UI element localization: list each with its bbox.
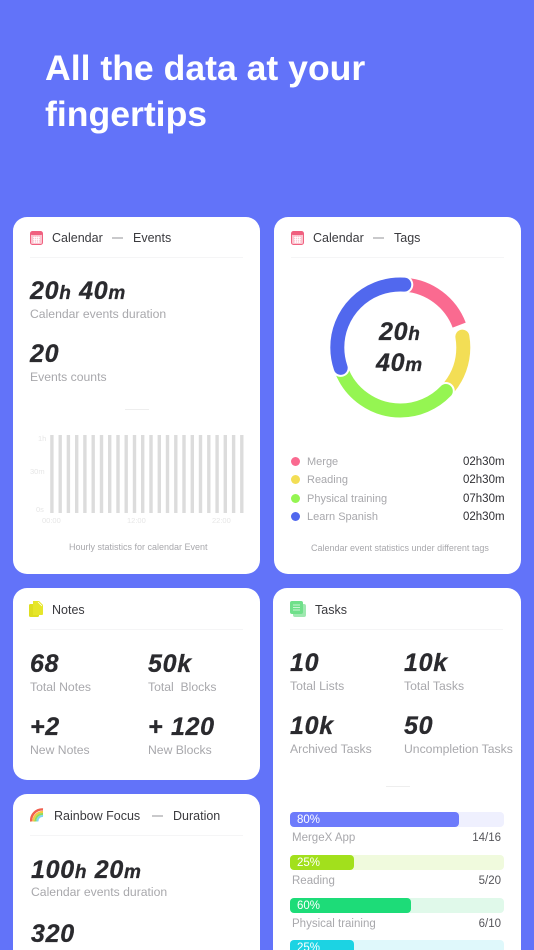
progress: Physical training: 60%	[297, 900, 320, 912]
chart caption: Calendar event statistics under different tags	[311, 543, 489, 553]
label: total notes: Total Notes	[30, 680, 91, 694]
progress: MergeX App	[290, 812, 504, 844]
progress: Reading: Reading	[292, 875, 335, 887]
progress: Reading	[290, 855, 504, 887]
label: new blocks: New Blocks	[148, 743, 212, 757]
panel heading: Notes	[52, 603, 85, 617]
icon: tasks	[290, 601, 306, 617]
icon: rainbow	[30, 808, 44, 822]
bar chart: hourly statistics: 30m	[30, 467, 45, 476]
bar chart: hourly statistics: 00:00	[42, 516, 61, 525]
bar chart: hourly statistics: 12:00	[127, 516, 146, 525]
progress: Reading: 25%	[297, 857, 320, 869]
panel: tasks	[273, 588, 521, 950]
progress: Physical training	[290, 898, 504, 930]
legend: Physical training	[307, 493, 387, 505]
bar chart: hourly statistics: 1h	[38, 434, 46, 443]
label: new notes: New Notes	[30, 743, 90, 757]
stat: event count: 20	[30, 340, 59, 368]
panel heading: Tasks	[315, 603, 347, 617]
panel: calendar events	[13, 217, 260, 574]
progress: Reading: 5/20	[479, 875, 501, 887]
panel: calendar events: Events	[133, 231, 171, 245]
stat: new notes: +2	[30, 713, 60, 741]
legend: Reading	[307, 474, 348, 486]
label: uncompletion tasks: Uncompletion Tasks	[404, 742, 513, 756]
panel heading: Calendar	[52, 231, 103, 245]
title: fingertips	[45, 94, 207, 134]
stat: duration: 100h 20m	[31, 856, 142, 884]
stat: uncompletion tasks: 50	[404, 712, 433, 740]
progress: MergeX App: MergeX App	[292, 832, 355, 844]
label: total tasks: Total Tasks	[404, 679, 464, 693]
legend: 07h30m	[463, 493, 505, 505]
stat: total blocks: 50k	[148, 650, 192, 678]
icon: calendar	[30, 231, 43, 245]
chart caption: Hourly statistics for calendar Event	[69, 542, 208, 552]
panel: calendar tags	[274, 217, 521, 574]
donut centre value: 20h	[379, 318, 421, 346]
panel: calendar tags: 40m	[376, 349, 423, 377]
label: total lists: Total Lists	[290, 679, 344, 693]
legend: 02h30m	[463, 474, 505, 486]
stat: total notes: 68	[30, 650, 59, 678]
title: All the data at your	[45, 48, 365, 88]
panel: rainbow focus: Duration	[173, 809, 220, 823]
progress: MergeX App: 80%	[297, 814, 320, 826]
legend: Merge	[307, 456, 338, 468]
stat: duration: 20h 40m	[30, 277, 126, 305]
bar chart: hourly statistics	[30, 434, 244, 525]
legend: Learn Spanish	[307, 511, 378, 523]
stat: archived tasks: 10k	[290, 712, 334, 740]
progress: Physical training: 6/10	[479, 918, 501, 930]
label: total blocks: Total Blocks	[148, 680, 216, 694]
progress: MergeX App: 14/16	[472, 832, 501, 844]
label: duration: Calendar events duration	[30, 307, 166, 321]
stat: count: 320	[31, 920, 75, 948]
donut chart	[330, 278, 470, 418]
legend: 02h30m	[463, 456, 505, 468]
panel: rainbow focus	[13, 794, 260, 950]
icon: notes	[29, 601, 43, 617]
stat: total tasks: 10k	[404, 649, 448, 677]
stat: new blocks: + 120	[148, 713, 215, 741]
progress: Physical training: Physical training	[292, 918, 376, 930]
panel heading: Rainbow Focus	[54, 809, 140, 823]
stat: total lists: 10	[290, 649, 319, 677]
label: duration: Calendar events duration	[31, 885, 167, 899]
label: archived tasks: Archived Tasks	[290, 742, 372, 756]
panel: notes	[13, 588, 260, 780]
label: event count: Events counts	[30, 370, 107, 384]
panel heading: Calendar	[313, 231, 364, 245]
bar chart: hourly statistics: 22:00	[212, 516, 231, 525]
icon: calendar	[291, 231, 304, 245]
legend	[291, 456, 505, 523]
legend: 02h30m	[463, 511, 505, 523]
title	[45, 48, 365, 134]
panel: calendar tags: Tags	[394, 231, 420, 245]
bar chart: hourly statistics: 0s	[36, 505, 44, 514]
